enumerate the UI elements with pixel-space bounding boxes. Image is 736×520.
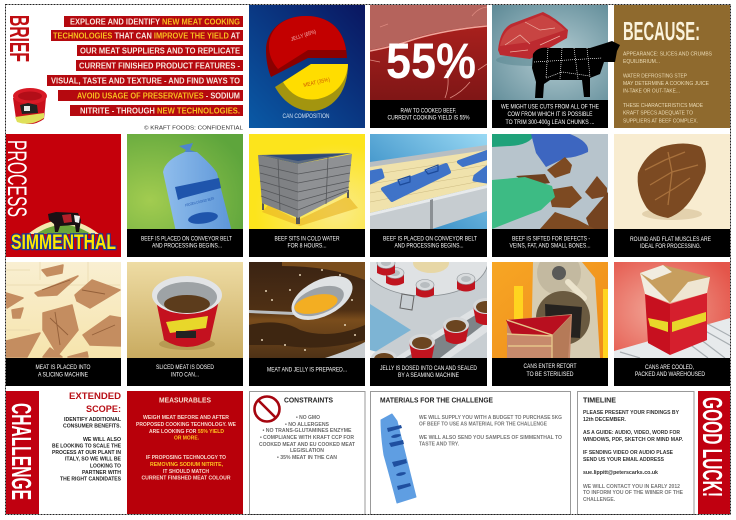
- panel: can composition: [249, 5, 365, 128]
- text block: brief statement: TECHNOLOGIES THAT CAN IMPROVE THE YIELD AT: [53, 32, 240, 40]
- caption: BEEF SITS IN COLD WATER: [274, 236, 340, 242]
- text block: brief statement: AVOID USAGE OF PRESERVATIVES - SODIUM: [77, 92, 240, 100]
- illustration: retort and crate: [506, 262, 608, 358]
- text block: timeline details: WINDOWS, PDF, SKETCH OR MIND MAP.: [583, 437, 683, 443]
- panel: slicing: [6, 262, 122, 386]
- caption: MEAT IS PLACED INTO: [36, 365, 91, 371]
- heading: extended scope: SCOPE:: [86, 404, 121, 415]
- caption: RAW TO COOKED BEEF,: [400, 109, 457, 115]
- text block: brief statement: VISUAL, TASTE AND TEXTURE - AND FIND WAYS TO: [51, 76, 240, 86]
- caption: [492, 358, 608, 386]
- caption: [370, 358, 487, 386]
- text block: measures: IT SHOULD MATCH: [163, 469, 209, 475]
- caption: CANS ENTER RETORT: [524, 364, 577, 370]
- text block: scope: [52, 417, 122, 483]
- caption: JELLY IS DOSED INTO CAN AND SEALED: [380, 366, 478, 372]
- caption: ROUND AND FLAT MUSCLES ARE: [630, 237, 711, 243]
- icon: cow silhouette: [532, 41, 620, 98]
- text block: scope: PROCESS AT OUR PLANT IN: [52, 450, 121, 456]
- caption: [614, 358, 730, 386]
- caption: [492, 229, 608, 257]
- illustration: meat slices: [6, 262, 122, 357]
- panel: timeline: [578, 392, 694, 514]
- caption: A SLICING MACHINE: [38, 373, 88, 379]
- panel: round and flat muscles: [614, 134, 730, 257]
- caption: [492, 100, 608, 128]
- text block: measures: PROPOSED COOKING TECHNOLOGY. WE: [136, 422, 236, 428]
- text block: scope: THE RIGHT CANDIDATES: [60, 477, 121, 483]
- text block: timeline details: sue.lippitt@peterscarks.co.uk: [583, 470, 658, 476]
- text block: timeline details: [583, 410, 683, 503]
- text block: scope: BE LOOKING TO SCALE THE: [52, 443, 121, 449]
- text block: brief statement: EXPLORE AND IDENTIFY NEW MEAT COOKING: [70, 18, 240, 26]
- panel: meat and jelly: [249, 262, 365, 386]
- caption: CAN COMPOSITION: [282, 114, 330, 120]
- text block: brief statement: [47, 16, 243, 116]
- text block: scope: LOOKING TO: [90, 463, 121, 469]
- icon: simmenthal can: [13, 88, 47, 124]
- illustration: seaming line: [370, 262, 487, 358]
- caption: TO BE STERILISED: [526, 372, 574, 378]
- caption: WE MIGHT USE CUTS FROM ALL OF THE: [501, 105, 599, 111]
- pie chart: JELLY (65%): [290, 29, 317, 43]
- text block: scope: WE WILL ALSO: [83, 437, 121, 443]
- panel: frozen bag: [127, 134, 243, 257]
- panel: retort: [492, 251, 609, 386]
- big number: 55%: [386, 33, 476, 89]
- text block: reasons: IN-TAKE OR OUT-TAKE...: [623, 89, 680, 95]
- text block: reasons: APPEARANCE: SLICES AND CRUMBS: [623, 51, 712, 57]
- panel: 55 percent yield: [370, 5, 487, 128]
- text block: reasons: [623, 51, 712, 124]
- text block: timeline details: TO INFORM YOU OF THE WIINER OF THE: [583, 490, 683, 496]
- text block: timeline details: 12th DECEMBER.: [583, 417, 626, 423]
- panel: cold water tank: [249, 134, 365, 257]
- panel: seaming machine: [370, 262, 487, 386]
- text block: constraints list: LEGISLATION: [290, 448, 324, 454]
- panel: conveyor belt: [370, 134, 487, 257]
- icon: prohibition sign: [254, 396, 280, 422]
- caption: PACKED AND WAREHOUSED: [635, 372, 706, 378]
- caption: [614, 229, 730, 257]
- caption: BEEF IS PLACED ON CONVEYOR BELT: [141, 236, 232, 242]
- panel: extended scope: [52, 391, 122, 483]
- caption: COW FROM WHICH IT IS POSSIBLE: [508, 112, 592, 118]
- text block: measures: OR MORE.: [174, 436, 199, 442]
- caption: [127, 229, 243, 257]
- caption: BY A SEAMING MACHINE: [398, 373, 459, 379]
- illustration: open can: [152, 276, 222, 350]
- text block: scope: IDENTIFY ADDITIONAL: [64, 417, 122, 423]
- text block: materials: OF BEEF TO USE AS MATERIAL FOR THE CHALLENGE: [419, 422, 547, 428]
- text block: measures: REMOVING SODIUM NITRITE,: [150, 462, 223, 468]
- text block: timeline details: AS A GUIDE: AUDIO, VIDEO, WORD FOR: [583, 430, 680, 436]
- caption: AND PROCESSING BEGINS...: [152, 244, 222, 250]
- text block: scope: CONSUMER BENEFITS.: [63, 424, 121, 430]
- caption: [249, 229, 365, 257]
- text block: timeline details: IF SENDING VIDEO OR AUDIO PLASE: [583, 450, 673, 456]
- panel: constraints: [250, 392, 365, 514]
- text block: constraints list: [259, 415, 356, 461]
- heading: timeline: TIMELINE: [583, 396, 616, 404]
- heading: brief: BRIEF: [4, 15, 35, 62]
- illustration: ladle: [249, 262, 365, 358]
- text block: reasons: EQUILIBRIUM...: [623, 59, 660, 65]
- text block: constraints list: • NO TRANS-GLUTAMINES ENZYME: [262, 428, 352, 434]
- heading: constraints: CONSTRAINTS: [284, 396, 333, 404]
- section: brief: [4, 15, 243, 132]
- text block: materials: WE WILL ALSO SEND YOU SAMPLES OF SIMMENTHAL TO: [419, 435, 562, 441]
- text block: constraints list: • NO GMO: [296, 415, 320, 421]
- illustration: box on rollers: [614, 265, 730, 358]
- text block: measures: [136, 415, 236, 482]
- caption: SLICED MEAT IS DOSED: [156, 365, 215, 371]
- text block: constraints list: COOKED MEAT AND EU COOKED MEAT: [259, 442, 356, 448]
- pie chart: MEAT (35%): [303, 77, 331, 89]
- caption: [370, 100, 487, 128]
- text block: materials: TASTE AND TRY.: [419, 442, 459, 448]
- caption: BEEF IS SIFTED FOR DEFECTS -: [512, 236, 590, 242]
- text block: materials: [419, 415, 562, 448]
- caption: AND PROCESSING BEGINS...: [394, 244, 464, 250]
- text block: timeline details: CHALLENGE.: [583, 497, 615, 503]
- caption: FOR 8 HOURS...: [288, 244, 327, 250]
- text block: timeline details: PLEASE PRESENT YOUR FINDINGS BY: [583, 410, 679, 416]
- text block: brief statement: OUR MEAT SUPPLIERS AND TO REPLICATE: [80, 46, 240, 56]
- icon: water tank: [258, 153, 352, 224]
- heading: extended scope: EXTENDED: [69, 391, 121, 402]
- heading: measurables: MEASURABLES: [159, 398, 211, 404]
- panel: packed box: [614, 262, 730, 386]
- caption: [127, 358, 243, 386]
- text block: reasons: MAY DETERMINE A COOKING JUICE: [623, 81, 709, 87]
- panel: cow cuts: [492, 5, 620, 128]
- caption: VEINS, FAT, AND SMALL BONES...: [510, 244, 591, 250]
- panel: dosing into can: [127, 262, 243, 386]
- panel: measurables: [127, 391, 243, 514]
- caption: CANS ARE COOLED,: [645, 365, 694, 371]
- caption: [370, 229, 487, 257]
- panel: because: [614, 5, 730, 128]
- text block: materials: WE WILL SUPPLY YOU WITH A BUDGET TO PURCHASE 5KG: [419, 415, 562, 421]
- text block: reasons: WATER DEFROSTING STEP: [623, 74, 687, 80]
- text block: scope: PARTNER WITH: [82, 470, 121, 476]
- text block: constraints list: • COMPLIANCE WITH KRAFT CCP FOR: [260, 435, 354, 441]
- logo: simmenthal: SIMMENTHAL: [11, 231, 116, 254]
- icon: frozen bag: [381, 414, 416, 503]
- text block: constraints list: • 35% MEAT IN THE CAN: [277, 455, 337, 461]
- heading: process: PROCESS: [2, 140, 32, 217]
- text block: constraints list: • NO ALLERGENS: [285, 422, 329, 428]
- caption: [6, 358, 121, 386]
- copyright note: © KRAFT FOODS: CONFIDENTIAL: [144, 124, 243, 132]
- text block: measures: ARE LOOKING FOR 55% YIELD: [149, 429, 224, 435]
- caption: CURRENT COOKING YIELD IS 55%: [388, 116, 470, 122]
- pie chart: [266, 16, 348, 111]
- text block: brief statement: NITRITE - THROUGH NEW TECHNOLOGIES.: [80, 106, 240, 116]
- caption: INTO CAN...: [171, 373, 199, 379]
- text block: measures: WEIGH MEAT BEFORE AND AFTER: [143, 415, 229, 421]
- text block: reasons: SUPPLIERS AT BEEF COMPLEX.: [623, 118, 698, 124]
- text block: measures: IF PROPOSING TECHNOLOGY TO: [146, 455, 226, 461]
- illustration: conveyor: [370, 145, 487, 229]
- panel: process: [2, 134, 121, 257]
- icon: frozen beef bag: FROZEN COOKED BEEF: [185, 196, 215, 208]
- panel: sifting: [492, 134, 608, 257]
- text block: brief statement: CURRENT FINISHED PRODUCT FEATURES -: [79, 62, 240, 70]
- text block: scope: ITALY, SO WE WILL BE: [65, 457, 121, 463]
- text block: reasons: KRAFT SPECS ADEQUATE TO: [623, 111, 693, 117]
- illustration: beef cut: [496, 12, 568, 66]
- illustration: gloved hands and beef: [492, 134, 608, 229]
- panel: materials: [370, 392, 570, 514]
- heading: materials: MATERIALS FOR THE CHALLENGE: [380, 396, 493, 404]
- text block: timeline details: SEND US YOUR EMAIL ADDRESS: [583, 457, 664, 463]
- text block: measures: CURRENT FINISHED MEAT COLOUR: [142, 476, 231, 482]
- heading: extended scope: [69, 391, 121, 415]
- caption: TO TRIM 300-400g LEAN CHUNKS ...: [506, 120, 595, 126]
- text block: reasons: THESE CHARACTERISTICS MADE: [623, 103, 703, 109]
- caption: MEAT AND JELLY IS PREPARED...: [267, 368, 347, 374]
- caption: IDEAL FOR PROCESSING.: [640, 244, 701, 250]
- caption: BEEF IS PLACED ON CONVEYOR BELT: [383, 236, 477, 242]
- text block: timeline details: WE WILL CONTACT YOU IN EARLY 2012: [583, 484, 680, 490]
- illustration: beef muscle: [638, 144, 706, 220]
